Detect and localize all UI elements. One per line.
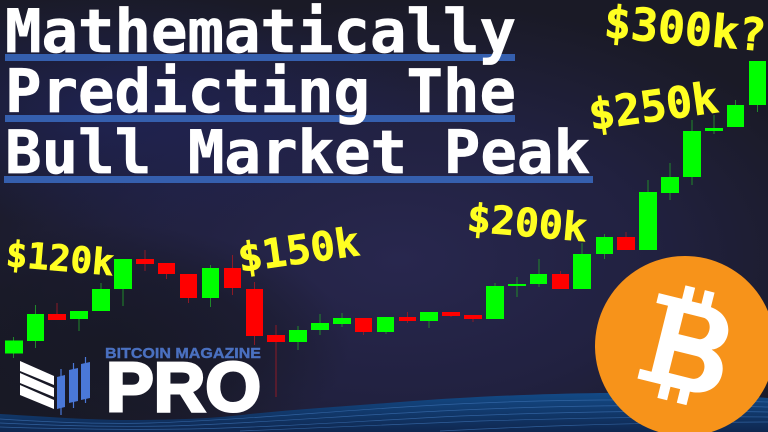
candlestick chart: [5, 61, 766, 397]
red candles: [48, 237, 635, 342]
logo text: Bitcoin Magazine: BITCOIN MAGAZINE: [105, 345, 261, 362]
title: [5, 0, 590, 188]
logo text: Pro: PRO: [106, 349, 261, 426]
wicks: [14, 61, 758, 397]
title underlines: [4, 54, 593, 183]
price labels: [4, 0, 768, 284]
logo: Bitcoin Magazine Pro: [20, 345, 261, 426]
label: $150k: $150k: [235, 219, 362, 282]
title: Predicting The: [5, 57, 516, 127]
green candles: [5, 61, 766, 354]
label: $200k: $200k: [465, 196, 589, 251]
title: Bull Market Peak: [5, 118, 590, 188]
bottom wave pattern: [0, 393, 768, 432]
logo icon: [20, 357, 90, 415]
label: $120k: $120k: [4, 234, 116, 284]
label: $250k: $250k: [586, 73, 721, 141]
icon: bitcoin coin: [595, 256, 768, 432]
